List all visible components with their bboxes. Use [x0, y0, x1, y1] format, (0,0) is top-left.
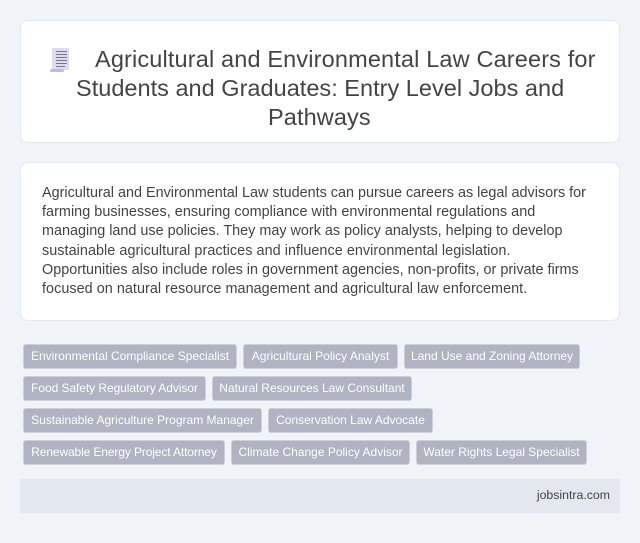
footer bar — [20, 479, 620, 513]
career tags: Food Safety Regulatory Advisor — [31, 381, 198, 395]
summary text: farming businesses, ensuring compliance with environmental regulations and — [42, 204, 535, 220]
career tags: Agricultural Policy Analyst — [252, 349, 389, 363]
summary panel — [20, 162, 620, 321]
summary text: managing land use policies. They may work as policy analysts, helping to develop — [42, 223, 562, 239]
summary text: focused on natural resource management and agricultural law enforcement. — [42, 281, 527, 297]
icon: document scroll — [50, 48, 69, 72]
title — [76, 46, 596, 130]
career tags: Environmental Compliance Specialist — [31, 349, 229, 363]
title: Agricultural and Environmental Law Careers for — [95, 46, 596, 72]
title: Pathways — [268, 104, 371, 130]
career tags — [23, 344, 587, 465]
career tags: Climate Change Policy Advisor — [238, 445, 403, 459]
career tags: Land Use and Zoning Attorney — [411, 349, 573, 363]
summary text: sustainable agricultural practices and influence environmental legislation. — [42, 243, 511, 259]
summary text: Agricultural and Environmental Law students can pursue careers as legal advisors for — [42, 185, 586, 201]
footer source text: jobsintra.com — [537, 488, 610, 502]
career tags: Sustainable Agriculture Program Manager — [31, 413, 254, 427]
header panel — [20, 20, 620, 143]
career tags: Conservation Law Advocate — [276, 413, 425, 427]
title: Students and Graduates: Entry Level Jobs and — [76, 75, 564, 101]
summary text — [42, 185, 586, 297]
summary text: Opportunities also include roles in government agencies, non-profits, or private firms — [42, 262, 579, 278]
career tags: Renewable Energy Project Attorney — [31, 445, 217, 459]
career tags: Water Rights Legal Specialist — [423, 445, 580, 459]
career tags: Natural Resources Law Consultant — [219, 381, 405, 395]
